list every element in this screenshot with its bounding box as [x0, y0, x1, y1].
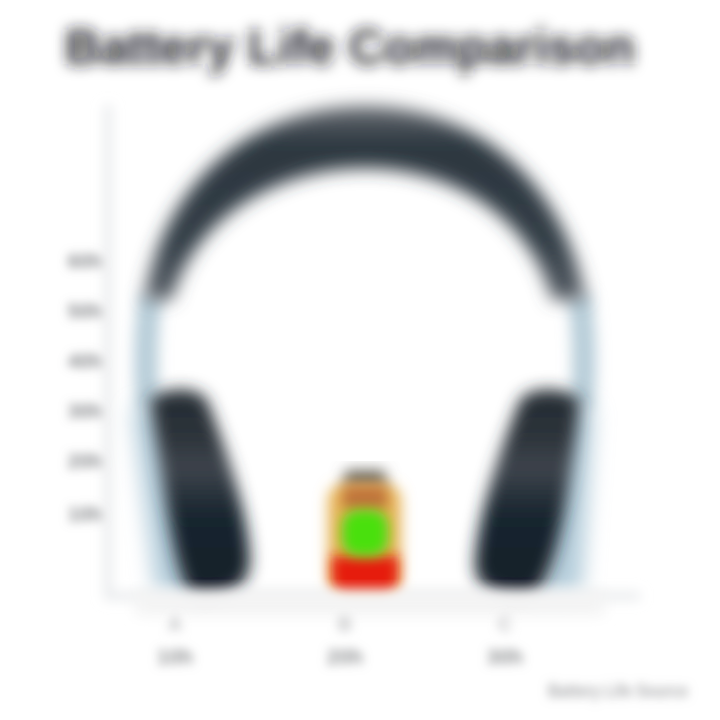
x-axis labels: B: [338, 614, 352, 636]
x-axis labels: A: [168, 614, 182, 636]
left ear cup: [150, 390, 250, 596]
x-axis labels: [157, 614, 523, 669]
battery upper shade: [343, 486, 387, 510]
y-axis labels: 50h: [68, 301, 102, 323]
y-axis labels: 10h: [68, 504, 102, 526]
x-axis labels: C: [498, 614, 512, 636]
headband side sleeves: [146, 295, 584, 410]
title: Battery Life Comparison: [65, 19, 635, 75]
y-axis labels: [68, 251, 102, 526]
right ear cushion glow: [540, 400, 594, 595]
battery green level: [342, 510, 388, 556]
headband: [144, 106, 586, 300]
left ear cushion glow: [132, 400, 195, 595]
battery red level: [332, 556, 398, 594]
right ear cup: [475, 390, 580, 596]
y-axis labels: 30h: [68, 401, 102, 423]
source note: Battery Life Source: [548, 681, 688, 701]
battery body: [328, 484, 401, 594]
y-axis labels: 60h: [68, 251, 102, 273]
x-axis label backdrop: [135, 590, 605, 616]
chart axes: [108, 105, 640, 600]
battery cap: [344, 470, 386, 492]
x-axis labels: 20h: [327, 646, 363, 669]
y-axis labels: 40h: [68, 351, 102, 373]
icon: battery: [328, 470, 401, 594]
headphones illustration: [132, 106, 594, 596]
y-axis labels: 20h: [68, 451, 102, 473]
x-axis labels: 30h: [487, 646, 523, 669]
x-axis labels: 10h: [157, 646, 193, 669]
